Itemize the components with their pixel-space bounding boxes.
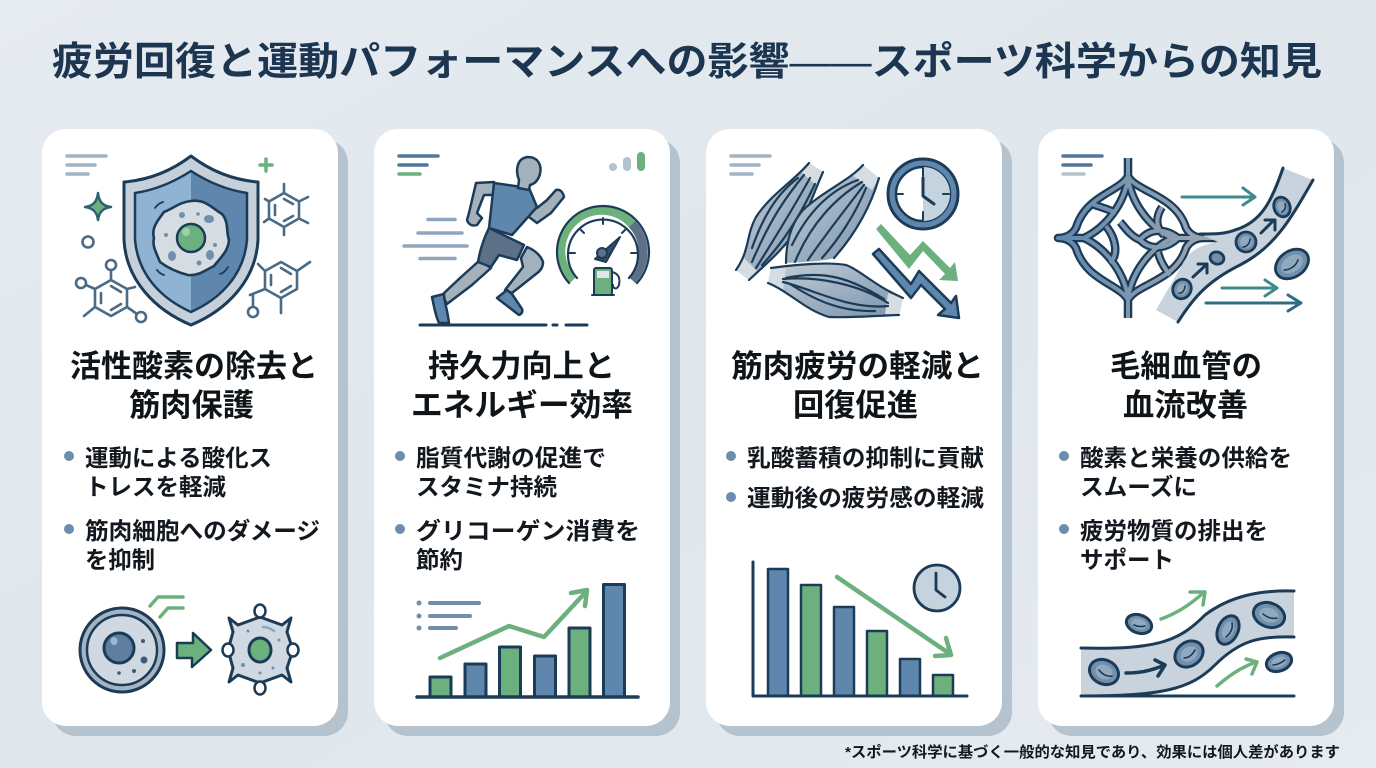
heading bbox=[411, 349, 633, 423]
heading: 筋肉保護 bbox=[129, 388, 254, 423]
bullet list: スムーズに bbox=[1080, 473, 1197, 500]
icon: capillary network bbox=[1058, 158, 1220, 318]
bullet list: 酸素と栄養の供給を bbox=[1080, 445, 1292, 471]
title: 疲労回復と運動パフォーマンスへの影響 ――スポーツ科学からの知見 bbox=[52, 41, 1322, 84]
heading: 回復促進 bbox=[793, 388, 918, 423]
icon: blood flow illustration bbox=[1081, 591, 1294, 696]
footnote: *スポーツ科学に基づく一般的な知見であり、効果には個人差があります bbox=[845, 743, 1340, 761]
bar chart: rising trend bbox=[416, 584, 638, 697]
panel: 毛細血管の血流改善 bbox=[1038, 129, 1344, 736]
heading bbox=[70, 349, 318, 423]
bullet list bbox=[1059, 445, 1292, 573]
panel: 筋肉疲労の軽減と回復促進 bbox=[706, 129, 1012, 736]
bullet list bbox=[395, 445, 640, 573]
bullet list: 運動後の疲労感の軽減 bbox=[747, 485, 985, 511]
bullet list: 筋肉細胞へのダメージ bbox=[85, 517, 320, 544]
bullet list: 運動による酸化ス bbox=[85, 445, 272, 471]
icon: downward arrows bbox=[873, 224, 959, 318]
icon: damaged cell to healthy cell bbox=[80, 597, 298, 694]
heading: 血流改善 bbox=[1123, 388, 1248, 423]
heading: 活性酸素の除去と bbox=[70, 349, 318, 384]
bullet list bbox=[64, 445, 320, 573]
bullet list bbox=[726, 445, 985, 511]
icon: blood vessel bbox=[1156, 168, 1314, 322]
icon: runner bbox=[404, 157, 587, 325]
icon: molecules and sparkles bbox=[76, 159, 310, 322]
heading: 筋肉疲労の軽減と bbox=[731, 349, 984, 384]
heading: エネルギー効率 bbox=[411, 388, 633, 423]
icon: muscles bbox=[736, 163, 903, 317]
bullet list: 乳酸蓄積の抑制に貢献 bbox=[747, 445, 985, 471]
bullet list: グリコーゲン消費を bbox=[416, 517, 640, 544]
heading: 毛細血管の bbox=[1110, 349, 1262, 384]
bullet list: トレスを軽減 bbox=[85, 474, 226, 500]
bullet list: 脂質代謝の促進で bbox=[416, 445, 606, 471]
bullet list: 疲労物質の排出を bbox=[1080, 518, 1268, 544]
icon: shield with cell bbox=[124, 156, 258, 325]
bullet list: 節約 bbox=[416, 547, 463, 573]
icon: flow arrows bbox=[1182, 188, 1301, 311]
panel: 持久力向上とエネルギー効率 bbox=[374, 129, 680, 736]
bullet list: スタミナ持続 bbox=[416, 474, 557, 500]
panel: 活性酸素の除去と筋肉保護 bbox=[42, 129, 348, 736]
bullet list: サポート bbox=[1080, 547, 1174, 573]
bar chart: declining fatigue bbox=[753, 562, 967, 696]
heading: 持久力向上と bbox=[428, 349, 615, 384]
icon: clock bbox=[888, 159, 958, 229]
icon: gauge with fuel pump bbox=[557, 206, 649, 295]
bullet list: を抑制 bbox=[85, 547, 155, 573]
heading bbox=[1110, 349, 1262, 423]
heading bbox=[731, 349, 984, 423]
